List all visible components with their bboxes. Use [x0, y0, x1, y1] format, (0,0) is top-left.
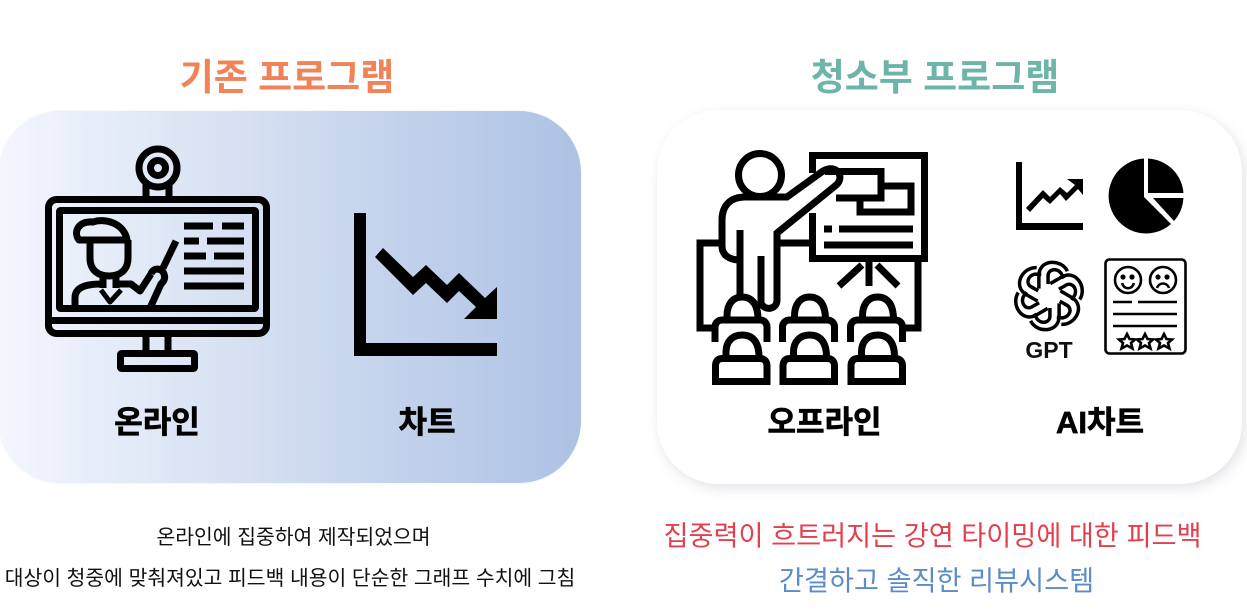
presenter: [77, 221, 128, 276]
icon: rising chart: [1016, 162, 1083, 230]
panel: cleaner program: [657, 110, 1242, 484]
board: [812, 156, 924, 258]
person: [738, 154, 782, 196]
label: AI chart: AI차트: [1056, 405, 1144, 440]
title: cleaner program: 청소부 프로그램: [811, 57, 1059, 98]
label: offline: 오프라인: [767, 405, 882, 440]
icon: online lecture monitor: [48, 149, 267, 368]
icon: offline lecture presenter: [700, 154, 924, 382]
text block: existing program description: 대상이 청중에 맞춰져있고 피드백 내용이 단순한 그래프 수치에 그침: [5, 567, 575, 590]
label: chart: 차트: [398, 405, 456, 440]
text block: cleaner program description: 집중력이 흐트러지는 강연 타이밍에 대한 피드백: [663, 520, 1202, 551]
audience: [715, 297, 767, 382]
icon: pie chart: [1109, 158, 1184, 233]
icon: GPT logo: [1011, 262, 1087, 330]
icon: review card: [1106, 260, 1186, 354]
label: online: 온라인: [114, 405, 200, 440]
icon: falling chart: [354, 213, 497, 356]
label: GPT: GPT: [1025, 337, 1073, 363]
back frame: [700, 243, 918, 328]
text block: cleaner program description: 간결하고 솔직한 리뷰시스템: [779, 565, 1094, 596]
text block: existing program description: [5, 526, 575, 590]
text block: cleaner program description: [663, 520, 1202, 596]
text lines: [184, 226, 244, 286]
text block: existing program description: 온라인에 집중하여 제작되었으며: [157, 526, 430, 549]
title: existing program: 기존 프로그램: [180, 57, 394, 98]
panel: existing program: [0, 111, 581, 483]
